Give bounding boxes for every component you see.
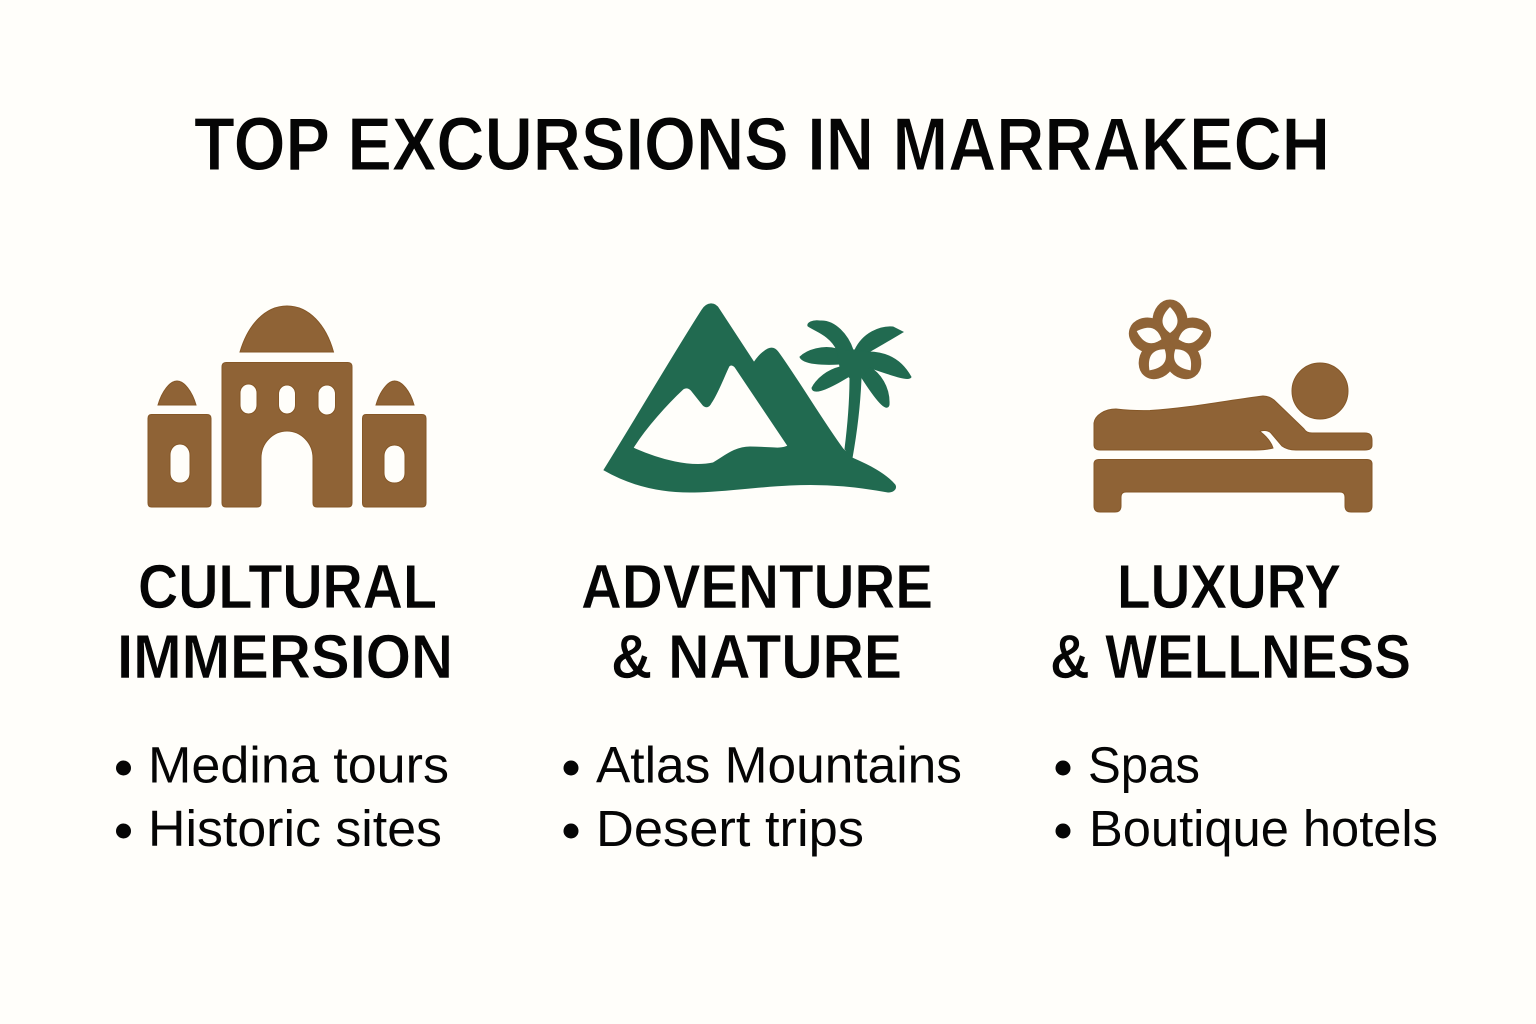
panel: cultural immersion (116, 306, 453, 857)
heading: luxury and wellness: & WELLNESS (1050, 622, 1411, 692)
list: adventure and nature: Desert trips (596, 800, 864, 857)
heading: cultural immersion: CULTURAL (138, 552, 437, 622)
list: luxury and wellness (1056, 736, 1438, 857)
list: adventure and nature (564, 736, 962, 857)
icon: person on massage table (1094, 363, 1372, 512)
heading: adventure and nature (581, 552, 933, 692)
panel: luxury and wellness (1050, 300, 1438, 857)
heading: cultural immersion (117, 552, 453, 692)
icon: mountains and palm tree (604, 304, 911, 492)
panel: adventure and nature (564, 304, 962, 857)
heading: cultural immersion: IMMERSION (117, 622, 453, 692)
title: TOP EXCURSIONS IN MARRAKECH (194, 102, 1330, 186)
heading: luxury and wellness (1050, 552, 1411, 692)
list: adventure and nature: Atlas Mountains (596, 736, 962, 794)
heading: luxury and wellness: LUXURY (1117, 552, 1341, 622)
icon: spa massage (1094, 300, 1372, 512)
list: luxury and wellness: Spas (1088, 736, 1200, 794)
list: luxury and wellness: Boutique hotels (1089, 800, 1438, 857)
icon: medina palace (148, 306, 426, 507)
list: cultural immersion: Medina tours (148, 736, 449, 794)
list: cultural immersion: Historic sites (148, 800, 442, 857)
icon: flower (1125, 300, 1215, 386)
heading: adventure and nature: ADVENTURE (581, 552, 933, 622)
heading: adventure and nature: & NATURE (611, 622, 902, 692)
list: cultural immersion (116, 736, 449, 857)
